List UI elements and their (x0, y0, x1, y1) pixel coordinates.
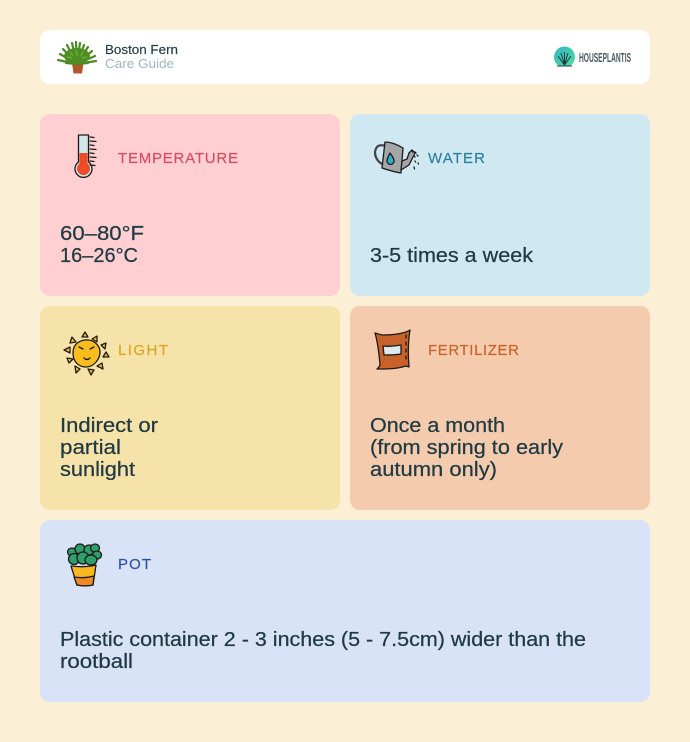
header bar (40, 30, 650, 84)
heading: WATER (428, 150, 485, 167)
logo: houseplantis: HOUSEPLANTIS (579, 50, 631, 65)
icon: boston fern (58, 42, 96, 74)
heading: FERTILIZER (428, 342, 519, 359)
title (105, 42, 178, 71)
panel: light (40, 306, 340, 510)
title: Boston Fern (105, 42, 178, 57)
logo: houseplantis (553, 46, 631, 70)
icon: sun (64, 332, 109, 375)
text block (60, 415, 158, 481)
text block: sunlight (60, 459, 135, 481)
panel: water (350, 114, 650, 296)
icon: potted plant (68, 544, 102, 586)
text block: 3-5 times a week (370, 245, 534, 267)
icon: watering can (375, 142, 418, 173)
text block (370, 415, 563, 481)
text block: (from spring to early (370, 437, 563, 459)
panel: pot (40, 520, 650, 702)
text block (60, 223, 144, 267)
text block: partial (60, 437, 121, 459)
heading: TEMPERATURE (118, 150, 238, 167)
text block (60, 629, 586, 673)
panel: temperature (40, 114, 340, 296)
title: Care Guide (105, 56, 174, 71)
panel: fertilizer (350, 306, 650, 510)
heading: POT (118, 556, 151, 573)
text block: 60–80°F (60, 223, 144, 245)
text block: Indirect or (60, 415, 158, 437)
text block: rootball (60, 651, 133, 673)
text block: 16–26°C (60, 245, 138, 267)
heading: LIGHT (118, 342, 168, 359)
icon: thermometer (75, 135, 96, 177)
text block: Once a month (370, 415, 505, 437)
icon: fertilizer bag (375, 330, 410, 369)
text block: Plastic container 2 - 3 inches (5 - 7.5cm) wider than the (60, 629, 586, 651)
text block: autumn only) (370, 459, 497, 481)
